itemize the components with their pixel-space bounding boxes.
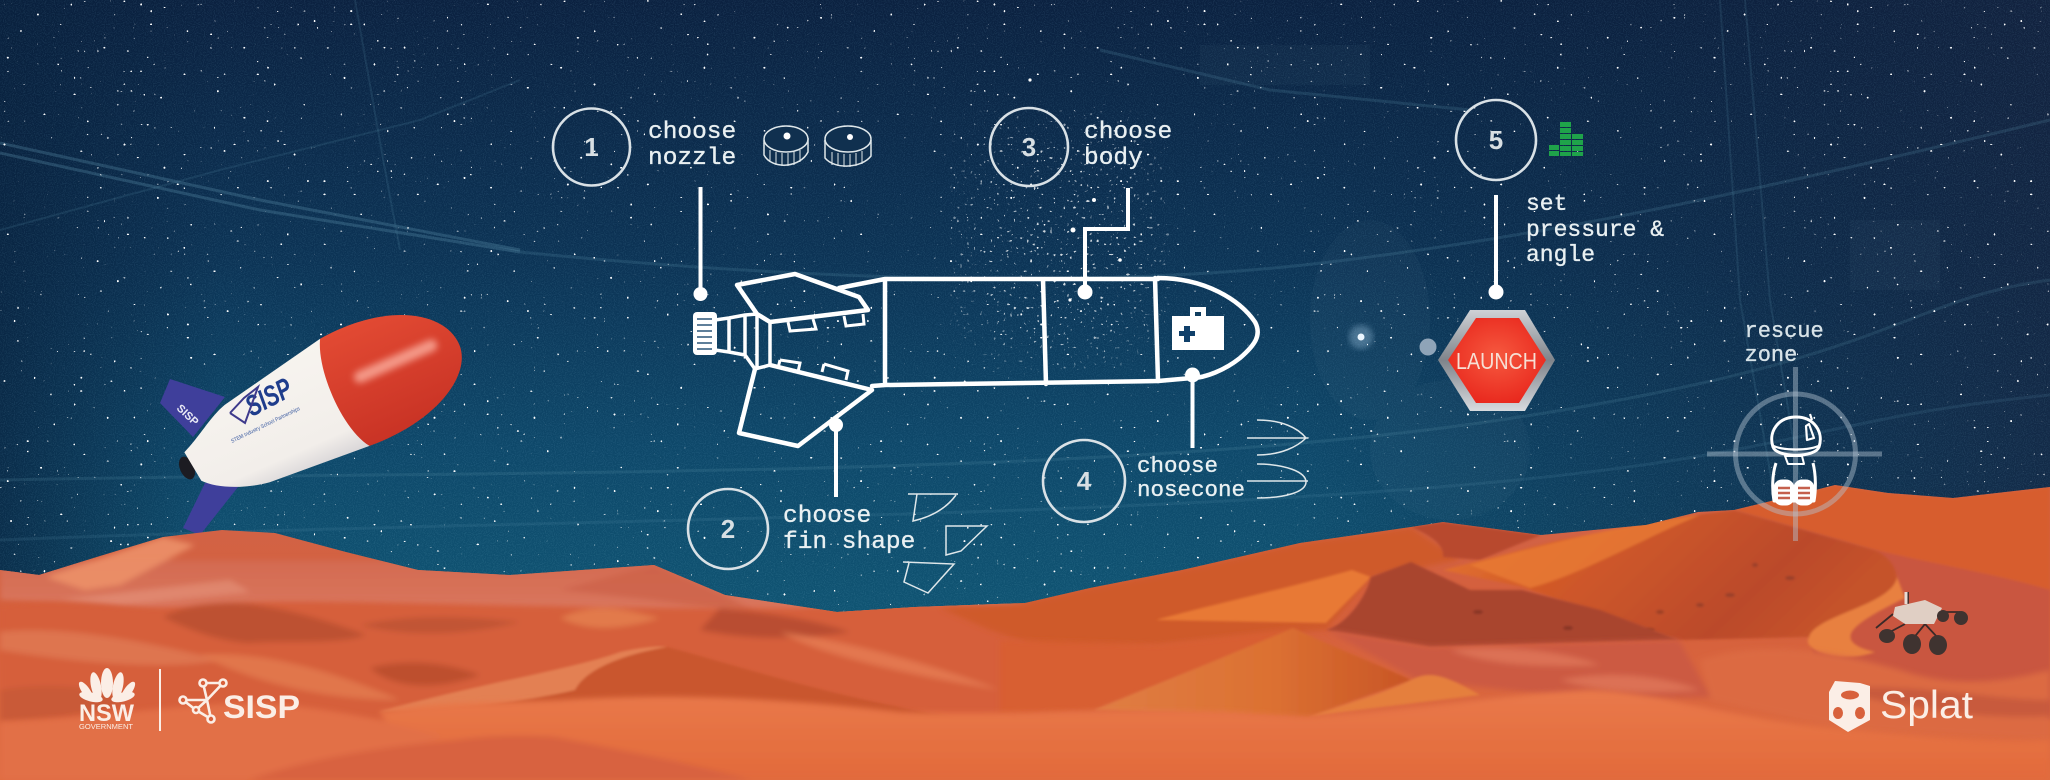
- step 1: choose nozzle: 1: [584, 132, 599, 162]
- rippled dunes below dark face: [1002, 630, 2050, 720]
- NSW Government logo: NSW: [79, 700, 134, 727]
- leader line: [1078, 188, 1128, 300]
- Splat logo: Splat: [1880, 684, 1973, 727]
- rocket schematic: [693, 274, 1258, 446]
- logo divider: [159, 669, 161, 731]
- label: fin shape: [783, 529, 915, 556]
- leader line: [1185, 368, 1200, 448]
- rocket fin, upper: SISP: [174, 402, 200, 428]
- nose outline: [1158, 278, 1258, 381]
- icon: nosecone shapes: [1247, 420, 1308, 498]
- label: choose: [648, 119, 736, 146]
- launch button: [1420, 310, 1555, 411]
- lower fin: [739, 365, 872, 446]
- rocket fin, lower: [183, 482, 242, 535]
- upper right ridge: [940, 527, 1460, 650]
- launch button: LAUNCH: [1456, 348, 1537, 374]
- upper fin: [737, 274, 868, 322]
- fin tabs: [778, 314, 864, 380]
- icon: fin shapes: [903, 494, 987, 593]
- nozzle cap: [693, 312, 717, 355]
- middle dunes, left half: [0, 602, 1052, 722]
- label: set: [1526, 191, 1567, 217]
- martian dune landscape: [0, 480, 2050, 780]
- rocket fin, upper: [160, 379, 225, 437]
- rocket nozzle: [176, 454, 198, 482]
- rover: [1876, 592, 1968, 655]
- label: choose: [1137, 453, 1218, 479]
- foreground dunes: [0, 690, 2050, 780]
- step 5: set pressure and angle: [1456, 100, 1664, 300]
- rocket decal: SISP: [240, 372, 298, 423]
- icon: green level meter: [1549, 122, 1583, 156]
- dark dune face: [1326, 562, 1679, 647]
- step 3: choose body: 3: [1022, 132, 1036, 162]
- first aid kit: [1172, 307, 1224, 350]
- leader line: [694, 187, 708, 301]
- leader line: [1488, 195, 1504, 300]
- step 4: choose nosecone: [1043, 368, 1308, 522]
- SISP logo: SISP: [223, 689, 300, 725]
- Splat logo: [1829, 681, 1973, 732]
- far salmon hills: [0, 536, 1021, 612]
- step 2: choose fin shape: 2: [721, 514, 735, 544]
- label: body: [1084, 145, 1143, 172]
- NSW Government logo: GOVERNMENT: [79, 724, 134, 731]
- NSW Government logo: [76, 668, 138, 731]
- rocket decal: STEM Industry School Partnerships: [230, 406, 301, 445]
- icon: astronaut: [1772, 414, 1820, 504]
- label: nozzle: [648, 145, 736, 172]
- step 5: set pressure and angle: 5: [1489, 125, 1503, 155]
- target reticle: [1707, 367, 1882, 541]
- rocket decal: [230, 372, 301, 445]
- label: zone: [1744, 343, 1797, 368]
- centre orange dune: [1094, 628, 1480, 717]
- rocket body and nose, built along the flight axis: [164, 287, 482, 516]
- label: angle: [1526, 242, 1595, 268]
- bottle neck: [715, 314, 770, 369]
- label: pressure &: [1526, 217, 1664, 243]
- body segments: [839, 278, 1158, 386]
- icon: waratah flower: [76, 668, 138, 704]
- step 2: choose fin shape: [688, 418, 987, 593]
- step 1: choose nozzle: [553, 108, 871, 301]
- label: nosecone: [1137, 477, 1245, 503]
- big lit hill: [1443, 510, 1905, 657]
- label: choose: [1084, 119, 1172, 146]
- step 4: choose nosecone: 4: [1077, 466, 1092, 496]
- icon: cube: [1829, 681, 1870, 732]
- leader line: [829, 418, 843, 497]
- step 3: choose body: [990, 108, 1172, 300]
- icon: network nodes: [180, 680, 226, 722]
- icon: nozzle caps: [764, 126, 871, 167]
- SISP logo: [180, 680, 300, 725]
- rocket photo on the left: [160, 287, 482, 535]
- rescue zone: [1707, 319, 1882, 541]
- label: choose: [783, 503, 871, 530]
- main left dune: [386, 646, 910, 712]
- label: rescue: [1744, 319, 1824, 344]
